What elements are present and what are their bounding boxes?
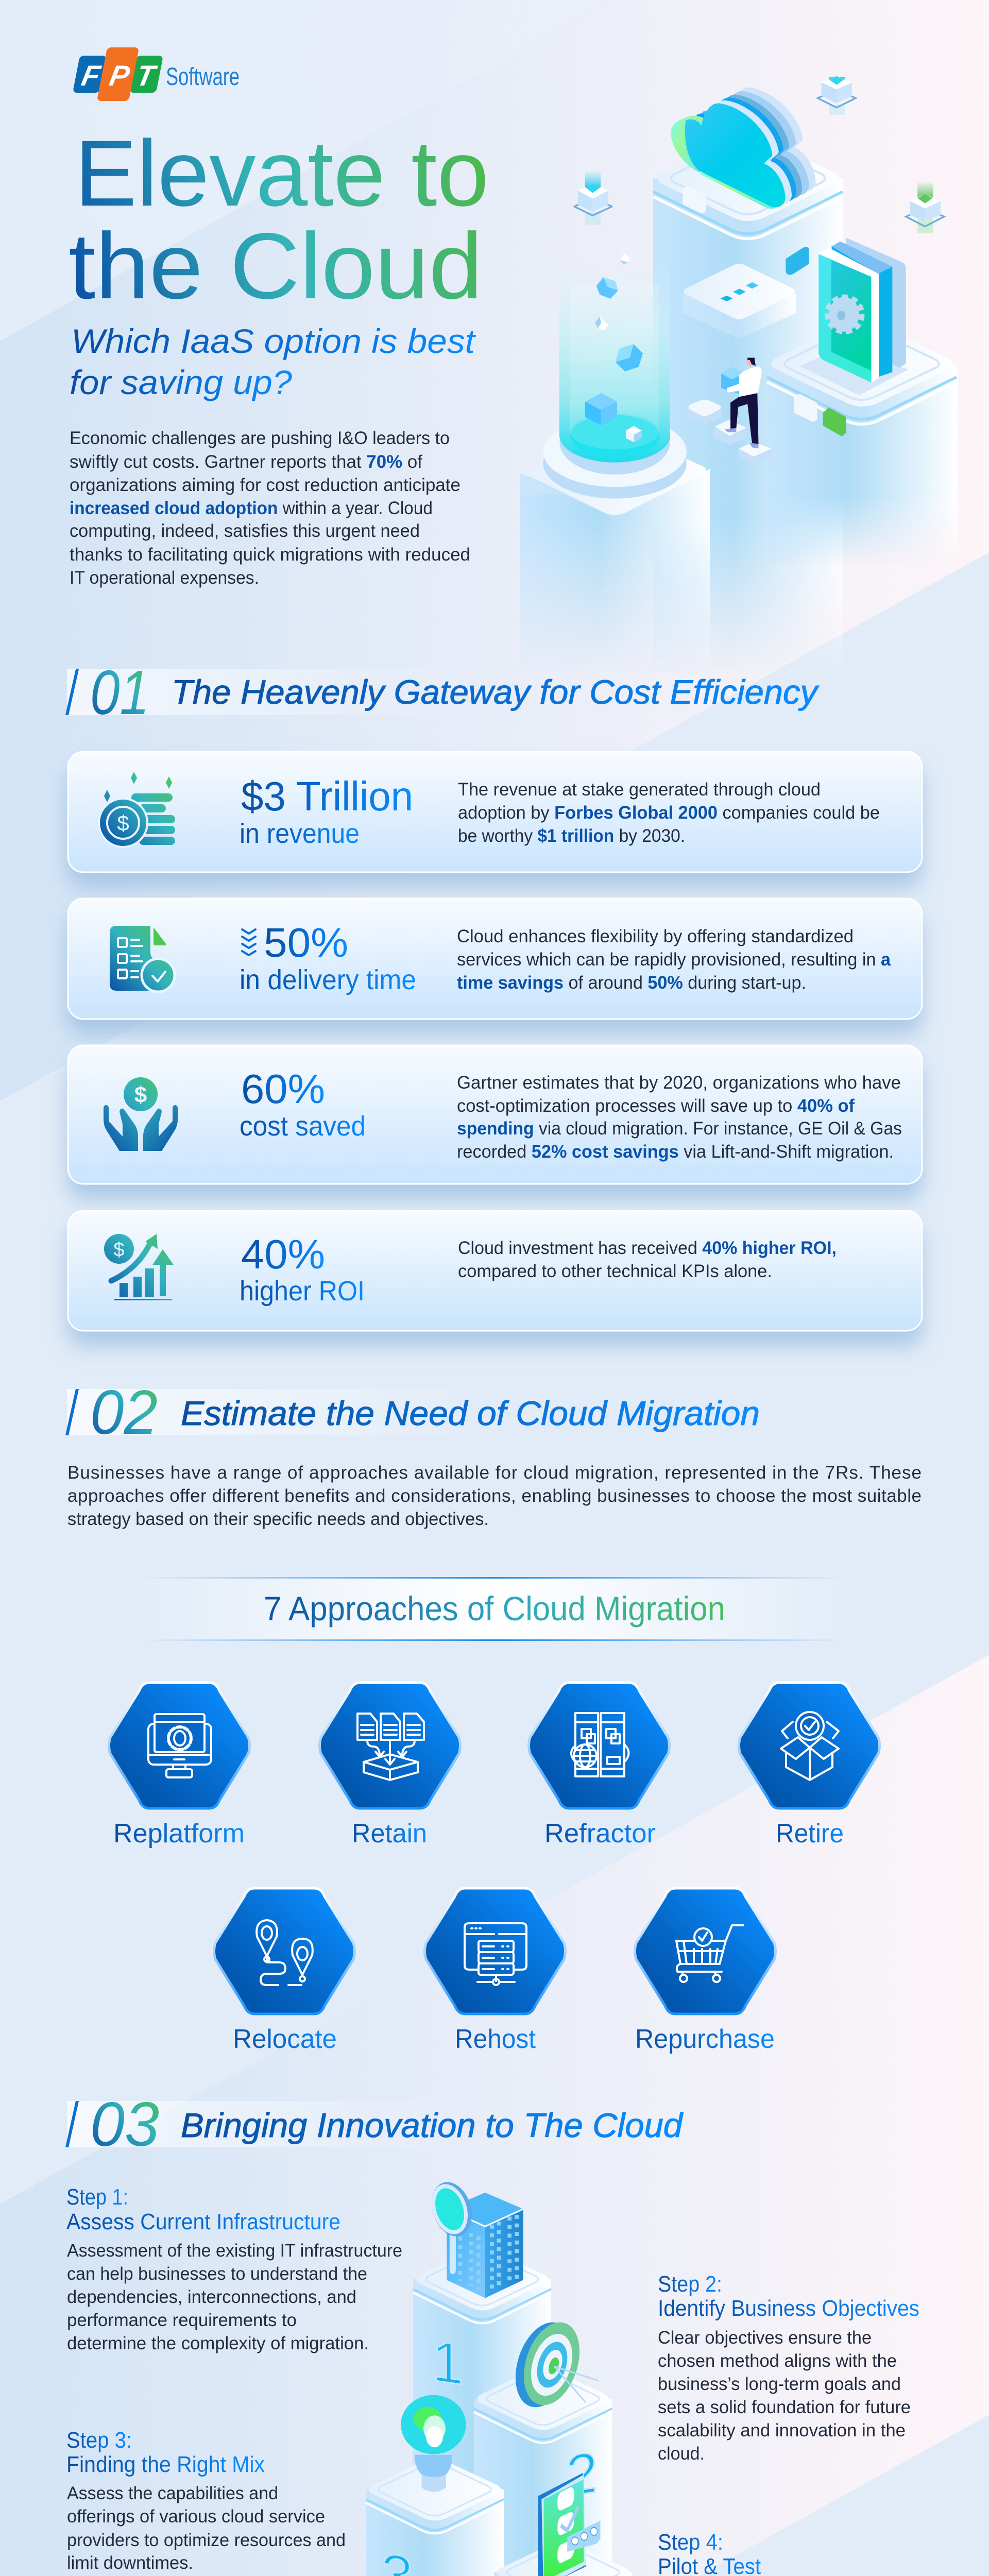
card: 40% higher ROI: higher ROI xyxy=(240,1276,365,1307)
card: 50% delivery time: services which can be rapidly provisioned, resulting in a xyxy=(457,950,891,970)
approach: Relocate xyxy=(214,1888,354,2054)
step 3 xyxy=(66,2428,346,2573)
device panel with gear xyxy=(800,238,909,395)
step 1: determine the complexity of migration. xyxy=(67,2333,369,2353)
step 2 xyxy=(658,2272,919,2464)
approach: Repurchase xyxy=(635,1888,776,2054)
icon: down chevrons xyxy=(242,929,255,955)
section 02 paragraph: strategy based on their specific needs and objectives. xyxy=(67,1509,489,1529)
tablet checklist xyxy=(538,2473,601,2576)
block with dots xyxy=(683,247,809,339)
icon: hands holding coin xyxy=(104,1077,178,1151)
approach: Rehost xyxy=(424,1888,566,2054)
approach: Replatform: Replatform xyxy=(113,1819,245,1849)
approach: Repurchase: Repurchase xyxy=(635,2024,775,2054)
card: 50% delivery time: Cloud enhances flexibility by offering standardized xyxy=(457,926,854,946)
intro paragraph: IT operational expenses. xyxy=(70,568,259,588)
right pillar xyxy=(766,344,958,560)
step 1: dependencies, interconnections, and xyxy=(67,2287,356,2307)
icon: map pins xyxy=(257,1920,313,1985)
step 2: business’s long-term goals and xyxy=(658,2374,901,2394)
card: $3 trillion: in revenue xyxy=(240,818,360,849)
tube with cubes xyxy=(543,253,687,499)
logo: F xyxy=(79,59,104,92)
section 03 heading: 03 xyxy=(90,2089,159,2159)
step 3: Finding the Right Mix xyxy=(66,2452,265,2477)
card: 60% cost saved: Gartner estimates that by 2020, organizations who have xyxy=(457,1073,901,1093)
card: 60% cost saved xyxy=(68,1045,922,1184)
card: $3 trillion: The revenue at stake generated through cloud xyxy=(458,779,821,800)
title: Elevate to xyxy=(75,121,489,226)
card: 40% higher ROI: Cloud investment has received 40% higher ROI, xyxy=(458,1238,837,1258)
pillar 1 xyxy=(413,2265,552,2474)
approach: Retain: Retain xyxy=(352,1819,427,1849)
step 4 xyxy=(658,2530,918,2576)
card: 50% delivery time xyxy=(68,899,922,1019)
icon: growth chart xyxy=(104,1234,174,1300)
step 1: Step 1: xyxy=(66,2184,128,2210)
card: 60% cost saved: cost-optimization processes will save up to 40% of xyxy=(457,1096,855,1116)
step 3: limit downtimes. xyxy=(67,2553,193,2573)
icon: files into box xyxy=(357,1714,424,1780)
step 1: Assess Current Infrastructure xyxy=(66,2209,340,2234)
icon: hands holding coin: $ xyxy=(134,1082,147,1108)
building xyxy=(447,2193,523,2298)
intro paragraph: thanks to facilitating quick migrations with reduced xyxy=(70,545,470,565)
section 02 paragraph: Businesses have a range of approaches available for cloud migration, represented in the 7Rs. These xyxy=(67,1463,922,1483)
icon: box with check xyxy=(781,1712,839,1780)
intro paragraph: Economic challenges are pushing I&O leaders to xyxy=(70,428,450,448)
card: $3 trillion: adoption by Forbes Global 2000 companies could be xyxy=(458,803,880,823)
icon: shopping cart xyxy=(676,1925,743,1982)
pillar 2: 2 xyxy=(566,2439,598,2509)
card: 40% higher ROI: 40% xyxy=(241,1231,325,1277)
subtitle: for saving up? xyxy=(70,363,292,401)
intro paragraph: organizations aiming for cost reduction anticipate xyxy=(70,475,461,495)
step 2: Identify Business Objectives xyxy=(658,2296,919,2321)
step 2: chosen method aligns with the xyxy=(658,2351,897,2371)
card: 40% higher ROI xyxy=(68,1211,922,1331)
card: 60% cost saved: recorded 52% cost savings via Lift-and-Shift migration. xyxy=(457,1142,894,1162)
approach: Refractor xyxy=(528,1683,670,1849)
card: 50% delivery time: 50% xyxy=(264,920,348,965)
section 02 paragraph: approaches offer different benefits and considerations, enabling businesses to choose the most suitable xyxy=(67,1486,922,1506)
step 2: cloud. xyxy=(658,2444,705,2464)
person carrying cube xyxy=(721,358,762,449)
card: $3 trillion xyxy=(68,752,922,872)
section 02 heading: 02 xyxy=(90,1377,158,1447)
pillar 1: 1 xyxy=(432,2328,464,2397)
card: 50% delivery time: in delivery time xyxy=(240,964,416,995)
approaches banner: 7 Approaches of Cloud Migration xyxy=(264,1589,725,1628)
intro paragraph: swiftly cut costs. Gartner reports that 70% of xyxy=(70,452,422,472)
approach: Replatform xyxy=(109,1683,249,1849)
card: $3 trillion: be worthy $1 trillion by 2030. xyxy=(458,826,685,846)
target with arrows xyxy=(505,2315,599,2415)
step tower xyxy=(366,2177,632,2576)
step 3: providers to optimize resources and xyxy=(67,2530,346,2550)
step 3: offerings of various cloud service xyxy=(67,2506,325,2527)
icon: coin stack xyxy=(99,772,175,847)
step 1 xyxy=(66,2184,402,2353)
light bulb xyxy=(401,2395,466,2492)
floating cubes xyxy=(574,76,944,233)
hero illustration xyxy=(520,76,958,675)
magnifier lens xyxy=(425,2177,479,2242)
title: the Cloud xyxy=(69,213,483,318)
logo xyxy=(71,47,240,101)
section 02 heading: Estimate the Need of Cloud Migration xyxy=(181,1394,760,1432)
cloud xyxy=(671,88,816,209)
approach: Rehost: Rehost xyxy=(455,2024,536,2054)
section 01 heading xyxy=(65,657,820,727)
step 1: performance requirements to xyxy=(67,2310,297,2330)
icon: coin stack: $ xyxy=(117,811,129,835)
approach: Retire: Retire xyxy=(776,1819,844,1849)
step 3: Step 3: xyxy=(66,2428,132,2453)
icon: server panels and globe xyxy=(571,1713,628,1776)
section 02 paragraph xyxy=(67,1463,922,1529)
approach: Retire xyxy=(739,1683,880,1849)
icon: browser and servers xyxy=(465,1923,526,1985)
approach: Relocate: Relocate xyxy=(233,2024,337,2054)
title xyxy=(69,121,489,318)
icon: checklist document xyxy=(110,926,175,992)
step 2: sets a solid foundation for future xyxy=(658,2397,911,2417)
step 2: Step 2: xyxy=(658,2272,722,2297)
logo: T xyxy=(133,59,160,92)
intro paragraph xyxy=(70,428,470,588)
icon: monitor gear xyxy=(148,1714,211,1777)
section 01 heading: The Heavenly Gateway for Cost Efficiency xyxy=(172,673,820,711)
logo: P xyxy=(107,59,132,92)
approach: Retain xyxy=(319,1683,461,1849)
steps and chips xyxy=(683,185,846,465)
step 2: Clear objectives ensure the xyxy=(658,2328,872,2348)
icon: growth chart: $ xyxy=(113,1239,125,1261)
step 3: Assess the capabilities and xyxy=(67,2483,278,2503)
card: 50% delivery time: time savings of around 50% during start-up. xyxy=(457,973,806,993)
card: 60% cost saved: 60% xyxy=(241,1066,325,1112)
center pillar xyxy=(653,135,843,675)
pillar 2 xyxy=(474,2368,612,2576)
left pillar xyxy=(520,459,710,654)
section 03 heading xyxy=(65,2089,684,2159)
section 02 heading xyxy=(65,1377,760,1447)
pillar 3 xyxy=(366,2459,504,2576)
section 01 heading: 01 xyxy=(90,657,149,727)
subtitle xyxy=(70,322,476,401)
step 1: Assessment of the existing IT infrastructure xyxy=(67,2241,402,2261)
pillar 4 xyxy=(494,2541,632,2576)
card: $3 trillion: $3 Trillion xyxy=(241,773,413,819)
section 03 heading: Bringing Innovation to The Cloud xyxy=(181,2106,684,2144)
card: 60% cost saved: cost saved xyxy=(240,1111,366,1142)
card: 40% higher ROI: compared to other technical KPIs alone. xyxy=(458,1261,772,1281)
subtitle: Which IaaS option is best xyxy=(71,322,476,360)
intro paragraph: increased cloud adoption within a year. Cloud xyxy=(70,498,433,518)
intro paragraph: computing, indeed, satisfies this urgent need xyxy=(70,521,420,541)
step 2: scalability and innovation in the xyxy=(658,2420,906,2441)
card: 60% cost saved: spending via cloud migration. For instance, GE Oil & Gas xyxy=(457,1118,902,1139)
logo: Software xyxy=(166,63,240,91)
step 1: can help businesses to understand the xyxy=(67,2264,367,2284)
step 4: Step 4: xyxy=(658,2530,723,2555)
approach: Refractor: Refractor xyxy=(544,1819,656,1849)
approaches banner xyxy=(140,1577,848,1641)
